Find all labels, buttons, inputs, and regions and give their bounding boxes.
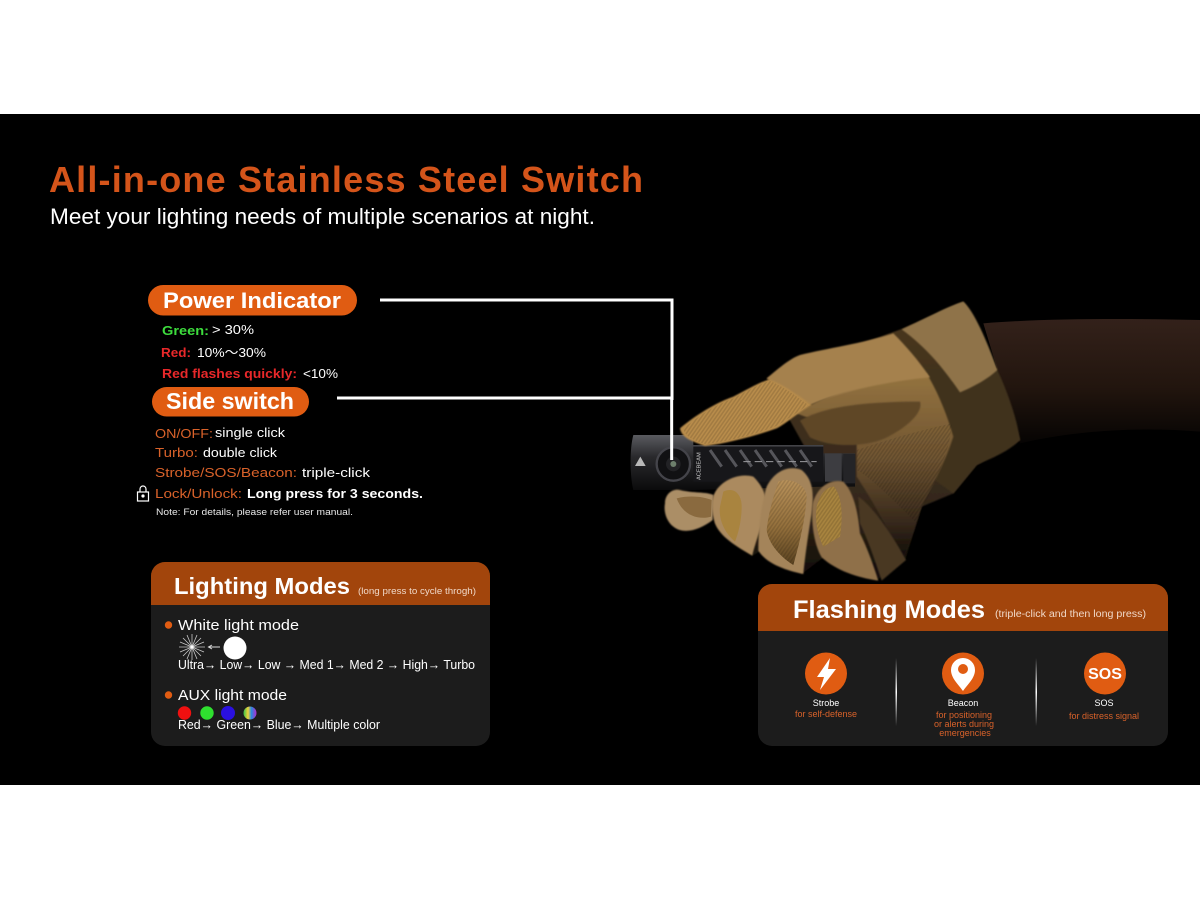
- section: side switch: [138, 387, 423, 518]
- red status: Red:: [161, 345, 191, 360]
- white light mode heading: White light mode: [178, 617, 299, 634]
- panel: lighting modes: [151, 562, 490, 746]
- lighting modes header: (long press to cycle throgh): [358, 586, 476, 596]
- sos label: [1069, 698, 1139, 721]
- beacon label: [934, 698, 994, 738]
- flashlight: [631, 435, 855, 490]
- thumb: [665, 490, 713, 531]
- strobe label: for self-defense: [795, 709, 857, 719]
- glove strap: [902, 302, 997, 392]
- finger three: [812, 481, 878, 581]
- finger four: [858, 497, 906, 581]
- red status: [161, 345, 266, 360]
- white mode sequence: Ultra→ Low→ Low → Med 1→ Med 2 → High→ Turbo: [178, 657, 475, 672]
- sos label: for distress signal: [1069, 711, 1139, 721]
- flashlight: ACEBEAM: [697, 452, 703, 480]
- beacon label: for positioning: [936, 710, 992, 720]
- finger two: [758, 468, 813, 574]
- wrist of glove: [923, 368, 1020, 493]
- heading pill: power indicator: [148, 285, 357, 316]
- black background band: [0, 114, 1200, 785]
- green status: [162, 322, 254, 338]
- connector line: drawn on top of finger: [667, 397, 676, 460]
- icon: sos: [1084, 652, 1126, 694]
- flashing modes header: [758, 584, 1168, 631]
- strobe label: [795, 698, 857, 719]
- lock instruction: Lock/Unlock:: [155, 486, 242, 501]
- illustration: gloved hand holding flashlight: [631, 302, 1200, 581]
- icon: strobe bolt: [805, 652, 847, 694]
- strobe instruction: [155, 465, 371, 480]
- strobe instruction: Strobe/SOS/Beacon:: [155, 465, 297, 480]
- heading pill: side switch: Side switch: [166, 388, 294, 414]
- connector line: power indicator: [380, 300, 672, 400]
- section: power indicator: [148, 285, 357, 381]
- beacon label: Beacon: [948, 698, 978, 708]
- subtitle: Meet your lighting needs of multiple scenarios at night.: [50, 204, 595, 229]
- icon: bright white circle: [224, 636, 246, 660]
- title: All-in-one Stainless Steel Switch: [49, 159, 643, 200]
- glove base silhouette: [710, 302, 1020, 581]
- lighting modes header: [151, 562, 490, 605]
- palm of glove: [797, 373, 953, 562]
- icon: ultra-low starburst: [179, 634, 205, 660]
- divider: [1036, 658, 1037, 726]
- flashing modes header: Flashing Modes: [793, 596, 985, 624]
- heading pill: power indicator: Power Indicator: [163, 288, 341, 313]
- green status: Green:: [162, 323, 209, 338]
- panel: flashing modes: [758, 584, 1168, 746]
- strobe instruction: triple-click: [302, 465, 371, 480]
- back of hand: [767, 333, 930, 405]
- aux mode sequence: Red→ Green→ Blue→ Multiple color: [178, 717, 381, 732]
- red flashing status: <10%: [303, 366, 338, 381]
- forearm: [983, 319, 1200, 443]
- note: Note: For details, please refer user manual.: [156, 507, 353, 518]
- beacon label: emergencies: [939, 728, 991, 738]
- lock instruction: [155, 486, 423, 501]
- icon: sos: SOS: [1088, 666, 1122, 683]
- palm patch: [800, 402, 920, 445]
- green status: > 30%: [212, 322, 254, 337]
- lighting modes header: Lighting Modes: [174, 573, 350, 599]
- arrow: brightness direction: [208, 645, 220, 649]
- aux light mode heading: AUX light mode: [178, 687, 287, 704]
- icon: lock: [138, 486, 148, 501]
- strobe label: Strobe: [813, 698, 839, 708]
- divider: [896, 658, 897, 726]
- finger one: [712, 475, 766, 556]
- turbo instruction: Turbo:: [155, 445, 198, 460]
- beacon label: or alerts during: [934, 719, 994, 729]
- turbo instruction: double click: [203, 445, 278, 460]
- aux colour dots: [178, 706, 256, 720]
- sos label: SOS: [1094, 698, 1114, 708]
- lock instruction: Long press for 3 seconds.: [247, 486, 423, 501]
- on/off instruction: [155, 425, 286, 441]
- turbo instruction: [155, 445, 278, 460]
- on/off instruction: single click: [215, 425, 286, 440]
- on/off instruction: ON/OFF:: [155, 426, 213, 441]
- flashing modes header: (triple-click and then long press): [995, 609, 1146, 620]
- index finger: [680, 379, 812, 446]
- red status: 10%～30%: [197, 345, 266, 360]
- connector line: side switch: [337, 396, 672, 400]
- red flashing status: Red flashes quickly:: [162, 366, 297, 381]
- icon: beacon pin: [942, 652, 984, 694]
